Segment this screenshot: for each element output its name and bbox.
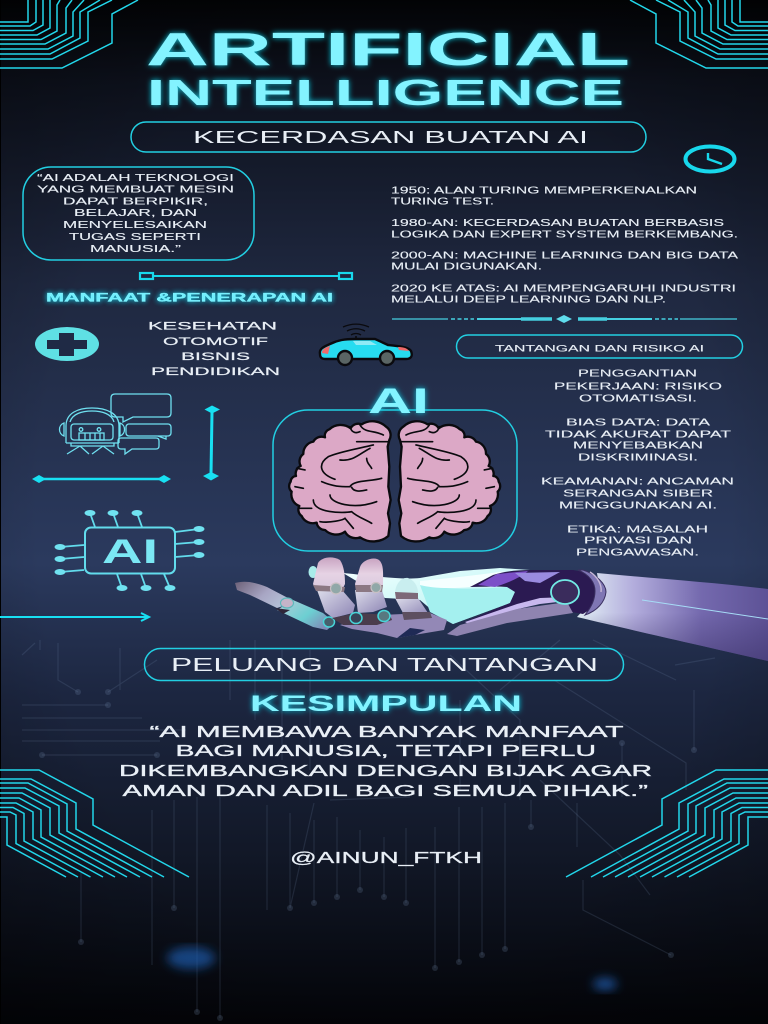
definition quote box: BELAJAR, DAN (74, 207, 197, 219)
circuit corner: bottom right (566, 770, 768, 877)
challenges text: MENGGUNAKAN AI. (559, 500, 717, 512)
conclusion text: “AI MEMBAWA BANYAK MANFAAT (150, 724, 624, 741)
tech divider (392, 315, 737, 323)
challenges text: ETIKA: MASALAH (567, 524, 708, 536)
heading: kesimpulan: KESIMPULAN (250, 691, 522, 716)
heading: AI: AI (368, 382, 429, 421)
timeline text: TURING TEST. (391, 196, 494, 208)
challenges text: BIAS DATA: DATA (566, 416, 710, 428)
icon: AI chip: AI (102, 533, 158, 571)
sector list: OTOMOTIF (163, 336, 268, 348)
challenges text (541, 368, 734, 558)
definition quote box: MENYELESAIKAN (63, 219, 207, 231)
timeline text (391, 186, 739, 306)
icon: medical cross (35, 327, 99, 361)
subtitle pill (131, 122, 646, 152)
icon: AI chip (54, 510, 204, 591)
challenges text: PRIVASI DAN (584, 534, 692, 546)
brain panel (273, 410, 517, 551)
timeline text: MELALUI DEEP LEARNING DAN NLP. (391, 294, 666, 306)
circuit corner: bottom left (0, 770, 189, 877)
connector line (140, 273, 352, 279)
timeline text: 1980-AN: KECERDASAN BUATAN BERBASIS (391, 218, 725, 229)
conclusion text (119, 724, 652, 800)
circuit corner: top left (0, 0, 138, 68)
horizontal arrow (32, 475, 171, 483)
title: INTELLIGENCE (147, 72, 624, 113)
timeline text: MULAI DIGUNAKAN. (391, 262, 542, 272)
sector list: BISNIS (181, 351, 250, 363)
challenges text: MENYEBABKAN (573, 440, 703, 452)
circuit board background pattern (22, 640, 715, 1021)
challenges text: PENGGANTIAN (578, 368, 697, 380)
challenges text: KEAMANAN: ANCAMAN (541, 476, 734, 488)
heading: manfaat: MANFAAT &PENERAPAN AI (46, 290, 333, 304)
robot hand illustration (235, 557, 768, 661)
forearm (577, 573, 768, 661)
peluang pill (144, 648, 624, 680)
back of hand (308, 566, 545, 624)
knuckles and palm base (332, 610, 447, 638)
circuit corner: top right (630, 0, 768, 68)
definition quote box: “AI ADALAH TEKNOLOGI (37, 172, 234, 184)
author handle: @AINUN_FTKH (290, 850, 482, 867)
title: ARTIFICIAL (146, 23, 630, 75)
arrow to hand (0, 613, 149, 621)
challenges text: PENGAWASAN. (576, 546, 699, 558)
definition quote box: DAPAT BERPIKIR, (63, 196, 208, 208)
definition quote box: TUGAS SEPERTI (69, 231, 201, 243)
fingers (313, 557, 428, 618)
title (146, 23, 630, 113)
brain illustration (289, 421, 500, 541)
definition quote box (23, 167, 254, 260)
subtitle pill: KECERDASAN BUATAN AI (193, 127, 588, 147)
blue light glows (167, 947, 617, 990)
vertical arrow (203, 406, 220, 480)
icon: connected car (320, 324, 412, 365)
timeline text: 2000-AN: MACHINE LEARNING DAN BIG DATA (391, 250, 739, 262)
challenges text: SERANGAN SIBER (563, 488, 714, 500)
peluang pill: PELUANG DAN TANTANGAN (171, 655, 598, 675)
challenges text: TIDAK AKURAT DAPAT (545, 428, 732, 440)
conclusion text: DIKEMBANGKAN DENGAN BIJAK AGAR (119, 763, 652, 780)
timeline text: LOGIKA DAN EXPERT SYSTEM BERKEMBANG. (391, 230, 738, 240)
mechanical wrist (447, 570, 606, 636)
icon: robot with speech bubbles (60, 394, 171, 454)
sector list: KESEHATAN (148, 320, 277, 332)
challenges pill (456, 335, 742, 358)
timeline text: 2020 KE ATAS: AI MEMPENGARUHI INDUSTRI (391, 284, 736, 294)
conclusion text: AMAN DAN ADIL BAGI SEMUA PIHAK.” (122, 783, 648, 800)
icon: clock (686, 146, 734, 172)
challenges text: DISKRIMINASI. (578, 452, 698, 464)
challenges text: PEKERJAAN: RISIKO (554, 380, 722, 392)
sector list (148, 320, 280, 378)
sector list: PENDIDIKAN (151, 366, 280, 378)
thumb (235, 582, 335, 630)
challenges pill: TANTANGAN DAN RISIKO AI (495, 344, 704, 354)
challenges text: OTOMATISASI. (579, 392, 697, 404)
conclusion text: BAGI MANUSIA, TETAPI PERLU (176, 743, 596, 760)
definition quote box: MANUSIA.” (90, 243, 182, 255)
timeline text: 1950: ALAN TURING MEMPERKENALKAN (391, 186, 697, 196)
definition quote box: YANG MEMBUAT MESIN (37, 184, 234, 196)
